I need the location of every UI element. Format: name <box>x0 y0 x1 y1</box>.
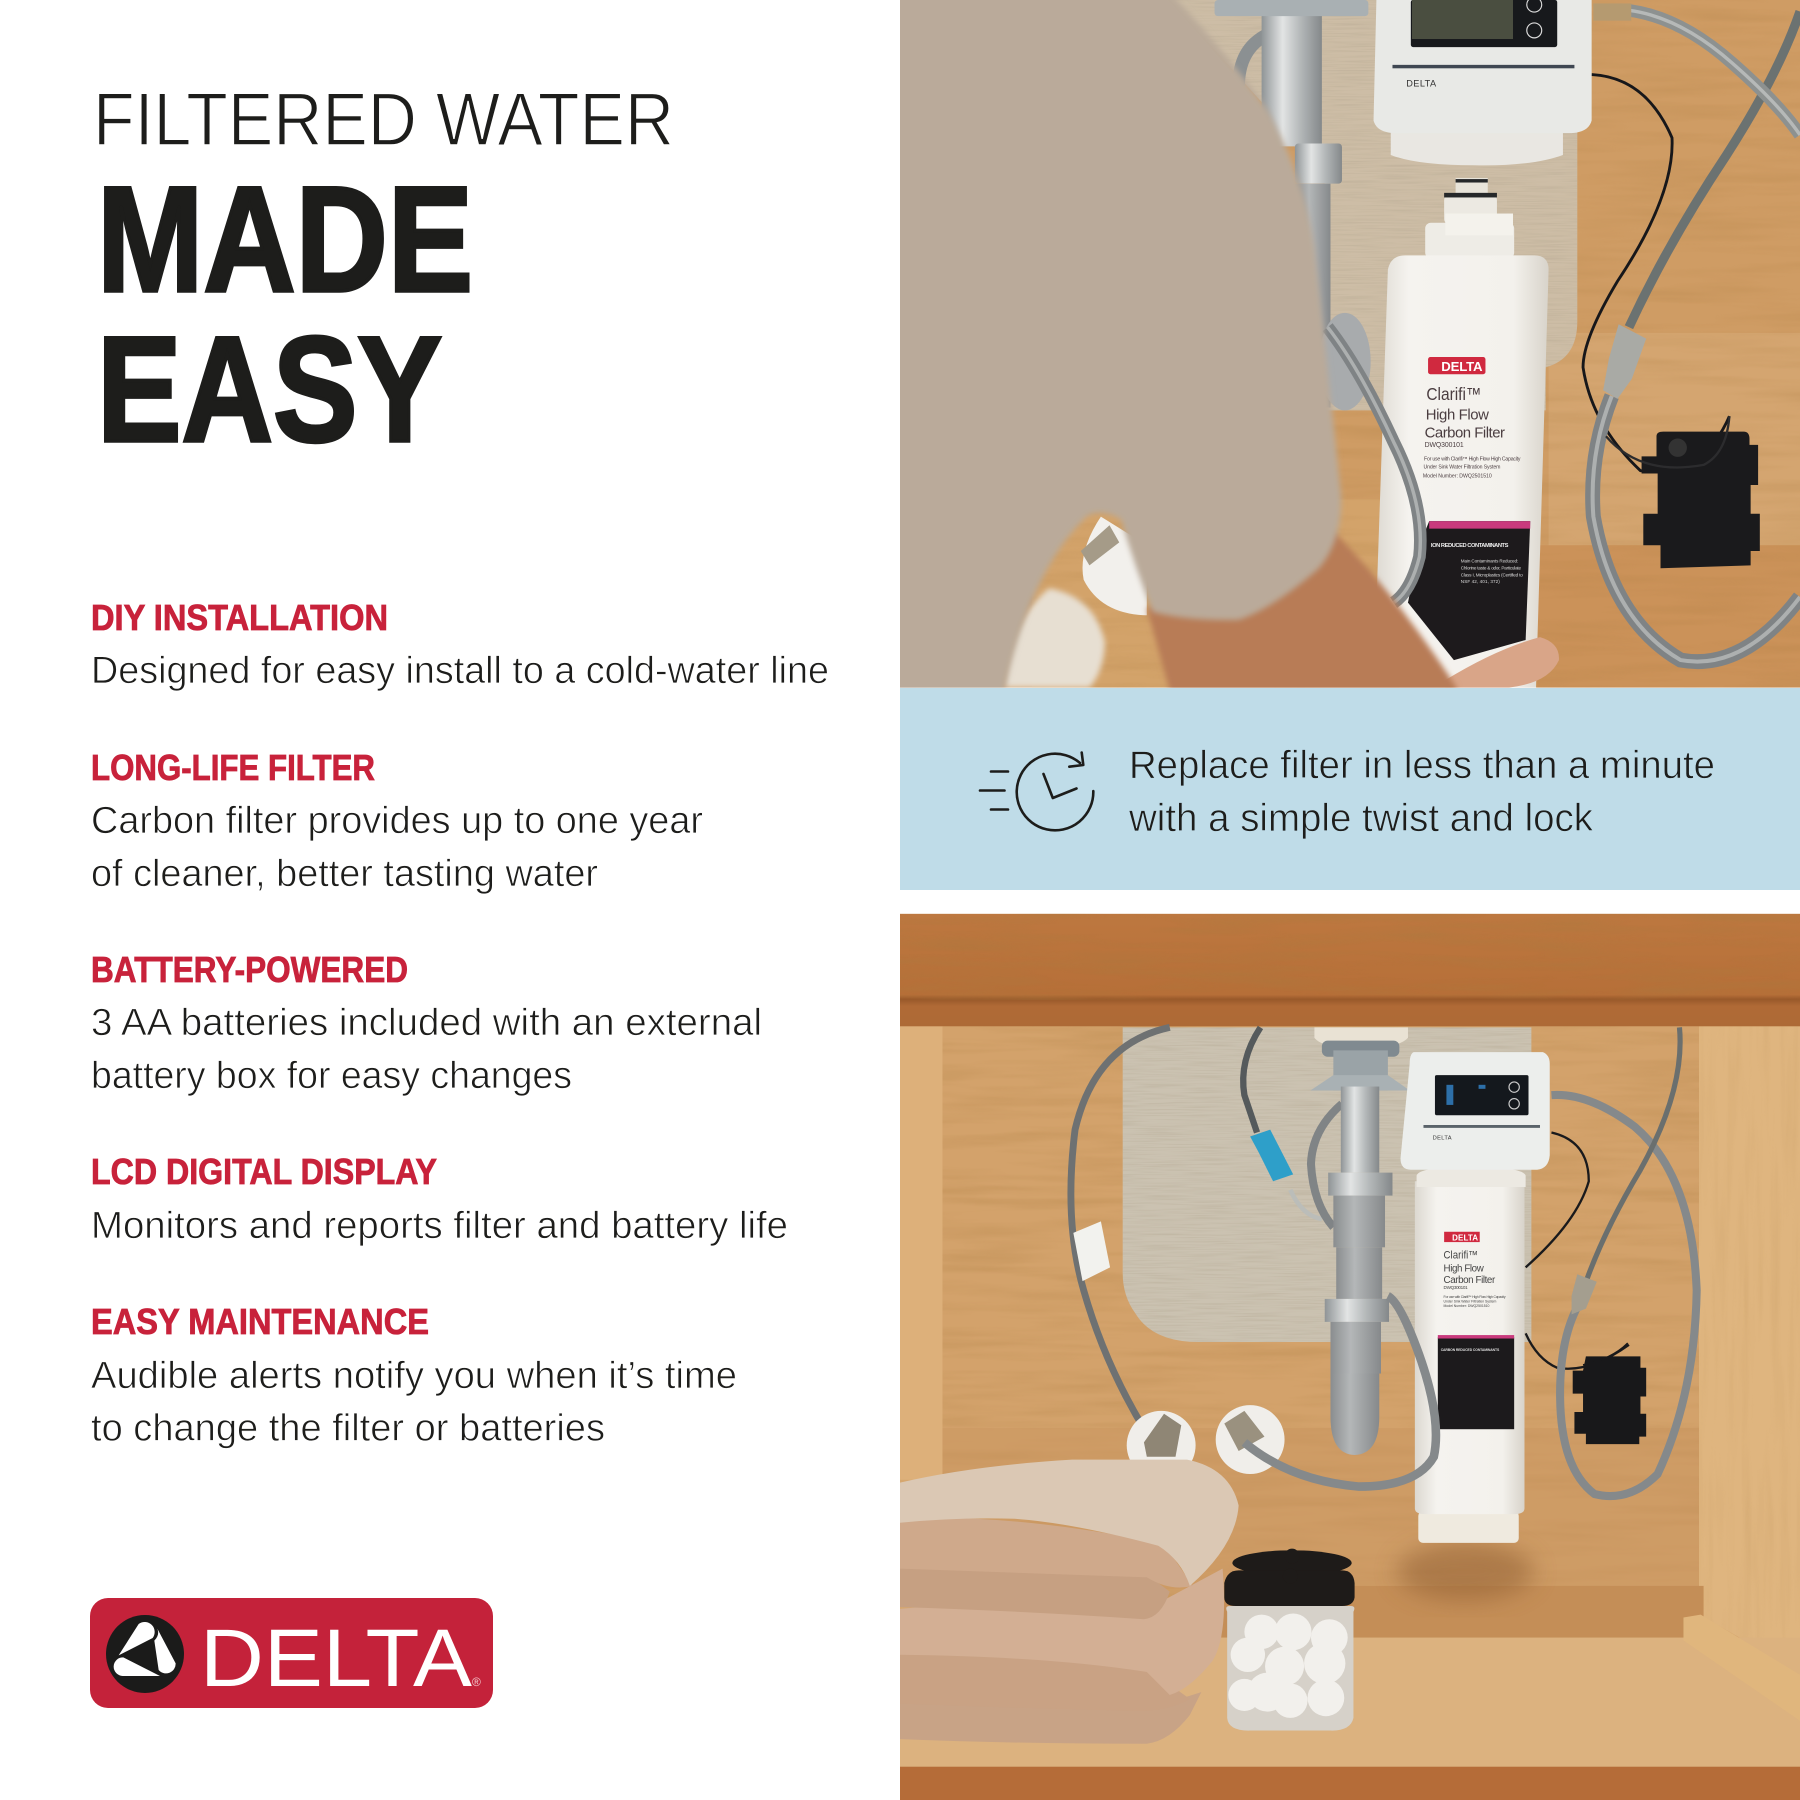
towel layer: second towel <box>900 1569 1224 1695</box>
drain pipe assembly <box>1310 1027 1410 1455</box>
Delta logo: ® <box>472 1675 481 1689</box>
monitor unit: DELTA <box>1406 79 1437 89</box>
feature: battery-powered: 3 AA batteries included with an external <box>91 1002 762 1044</box>
filter label: product name: Under Sink Water Filtration System <box>1423 464 1500 470</box>
filter label: contaminants panel: ION REDUCED CONTAMINANTS <box>1431 543 1509 549</box>
drain pipe <box>1215 0 1371 410</box>
filter label: product name: Model Number: DWQ2501510 <box>1444 1304 1490 1308</box>
feature: LCD digital display: LCD DIGITAL DISPLAY <box>91 1151 437 1192</box>
filter label: contaminants panel: Main Contaminants Reduced: <box>1461 559 1518 564</box>
photo: installed system in vanity cabinet <box>900 914 1800 1800</box>
feature: easy maintenance <box>91 1301 737 1450</box>
feature: long-life filter <box>91 747 703 895</box>
filter label: product name <box>1444 1250 1506 1308</box>
title line: filtered water: FILTERED WATER <box>93 77 674 161</box>
grey supply line with tag <box>1071 1027 1170 1442</box>
filter label: red logo <box>1444 1232 1480 1242</box>
feature: long-life filter: Carbon filter provides up to one year <box>91 800 703 842</box>
back lip <box>1221 1586 1704 1639</box>
battery cable <box>1526 1132 1629 1369</box>
braided hose: inlet <box>1593 396 1800 662</box>
monitor unit <box>1374 0 1592 165</box>
filter label: product name: DWQ300101 <box>1425 442 1464 449</box>
filter label: product name <box>1423 384 1521 480</box>
cartridge filter <box>1374 178 1549 688</box>
Delta logo <box>90 1598 493 1708</box>
filter label: product name: Clarifi™ <box>1426 384 1481 404</box>
feature: LCD digital display <box>91 1151 788 1247</box>
filter label: product name: Clarifi™ <box>1444 1250 1478 1262</box>
callout text: Replace filter in less than a minute <box>1129 744 1715 787</box>
feature: LCD digital display: Monitors and reports filter and battery life <box>91 1205 788 1247</box>
forearm and hand <box>1144 534 1559 688</box>
textured mat <box>1170 0 1577 410</box>
filter label: red logo <box>1428 357 1485 374</box>
feature list <box>91 597 829 1450</box>
feature: DIY installation: DIY INSTALLATION <box>91 597 388 638</box>
hose connector <box>1572 1274 1597 1314</box>
feature: easy maintenance: to change the filter or batteries <box>91 1408 605 1450</box>
filter label: contaminants panel <box>1408 521 1530 660</box>
towel layer: roll underside <box>900 1518 1193 1588</box>
filter label: contaminants panel: Chlorine taste & odor, Particulate <box>1461 565 1521 570</box>
grey water line <box>1587 1027 1680 1279</box>
textured mat <box>1123 1027 1531 1342</box>
photo: hands replacing filter under sink <box>877 0 1800 712</box>
feature: battery-powered: battery box for easy changes <box>91 1055 572 1097</box>
wall valve and towel ball <box>1003 517 1147 688</box>
feature: battery-powered <box>91 949 762 1097</box>
side strip <box>1684 1614 1738 1638</box>
braided hose: outlet loop <box>1551 1095 1697 1496</box>
towel layer: lower fold <box>900 1652 1190 1711</box>
front edge <box>900 1767 1800 1800</box>
icon: fast clock <box>980 752 1093 830</box>
towel layer: top roll <box>900 1460 1239 1586</box>
feature: DIY installation <box>91 597 829 692</box>
blue shutoff connector <box>1243 1027 1322 1219</box>
filter label: contaminants panel: CARBON REDUCED CONTAMINANTS <box>1441 1348 1500 1352</box>
logo mark: three teardrops <box>114 1622 176 1676</box>
braided hose: outlet <box>1593 3 1800 135</box>
right cabinet side <box>1699 1026 1800 1672</box>
filter label: product name: Carbon Filter <box>1444 1275 1496 1286</box>
callout: replace filter <box>900 688 1800 890</box>
glass jars with cotton balls <box>1224 1549 1355 1731</box>
top cabinet rail <box>900 914 1800 1026</box>
braided hose behind pipe <box>1311 1104 1342 1227</box>
title line: made: MADE <box>97 155 473 323</box>
feature: easy maintenance: Audible alerts notify you when it’s time <box>91 1355 737 1397</box>
wall valves <box>1127 1405 1285 1480</box>
filter label: red logo: DELTA <box>1452 1233 1478 1242</box>
filter label: red logo: DELTA <box>1441 359 1483 374</box>
shirt sleeve <box>877 0 1341 712</box>
monitor unit <box>1401 1052 1550 1170</box>
braided hose: cold line <box>1244 1296 1436 1487</box>
monitor unit: DELTA <box>1433 1135 1452 1141</box>
battery box <box>1573 1343 1646 1444</box>
callout text <box>1128 744 1715 840</box>
title line: easy: EASY <box>97 305 442 473</box>
back wall <box>940 1026 1701 1638</box>
filter label: product name: High Flow <box>1426 407 1489 424</box>
filter label: product name: DWQ300101 <box>1444 1285 1468 1290</box>
filter label: contaminants panel: NSF 42, 401, 372) <box>1461 579 1500 584</box>
braided hose: cold line <box>1328 327 1420 603</box>
title <box>93 77 674 473</box>
filter label: product name: Under Sink Water Filtration System <box>1444 1299 1496 1303</box>
towel layer: upper fold <box>900 1566 1170 1619</box>
battery box <box>1606 416 1760 568</box>
cartridge filter <box>1415 1167 1526 1543</box>
grey water line <box>1629 11 1800 327</box>
feature: long-life filter: of cleaner, better tasting water <box>91 853 598 895</box>
shelf floor <box>900 1638 1800 1768</box>
callout text: with a simple twist and lock <box>1128 797 1593 840</box>
feature: long-life filter: LONG-LIFE FILTER <box>91 747 375 788</box>
filter label: product name: Model Number: DWQ2501510 <box>1423 474 1492 480</box>
filter label: product name: Carbon Filter <box>1425 424 1505 441</box>
hose connector <box>1603 324 1646 399</box>
filter label: product name: For use with Clarifi™ High Flow High Capacity <box>1424 456 1521 462</box>
filter label: contaminants panel <box>1438 1335 1514 1429</box>
feature: battery-powered: BATTERY-POWERED <box>91 949 408 990</box>
stacked towels <box>900 1460 1239 1744</box>
shadow under filter <box>1396 1543 1534 1600</box>
towel layer: bottom <box>900 1692 1201 1744</box>
filter label: contaminants panel: Class I, Microplastics (Certified to <box>1461 572 1523 577</box>
logo wordmark: DELTA <box>200 1613 472 1704</box>
feature: easy maintenance: EASY MAINTENANCE <box>91 1301 429 1342</box>
filter label: product name: For use with Clarifi™ High Flow High Capacity <box>1444 1295 1506 1299</box>
feature: DIY installation: Designed for easy install to a cold-water line <box>91 650 829 692</box>
filter label: product name: High Flow <box>1444 1263 1485 1274</box>
battery cable <box>1583 75 1729 471</box>
left cabinet side <box>900 1026 942 1480</box>
